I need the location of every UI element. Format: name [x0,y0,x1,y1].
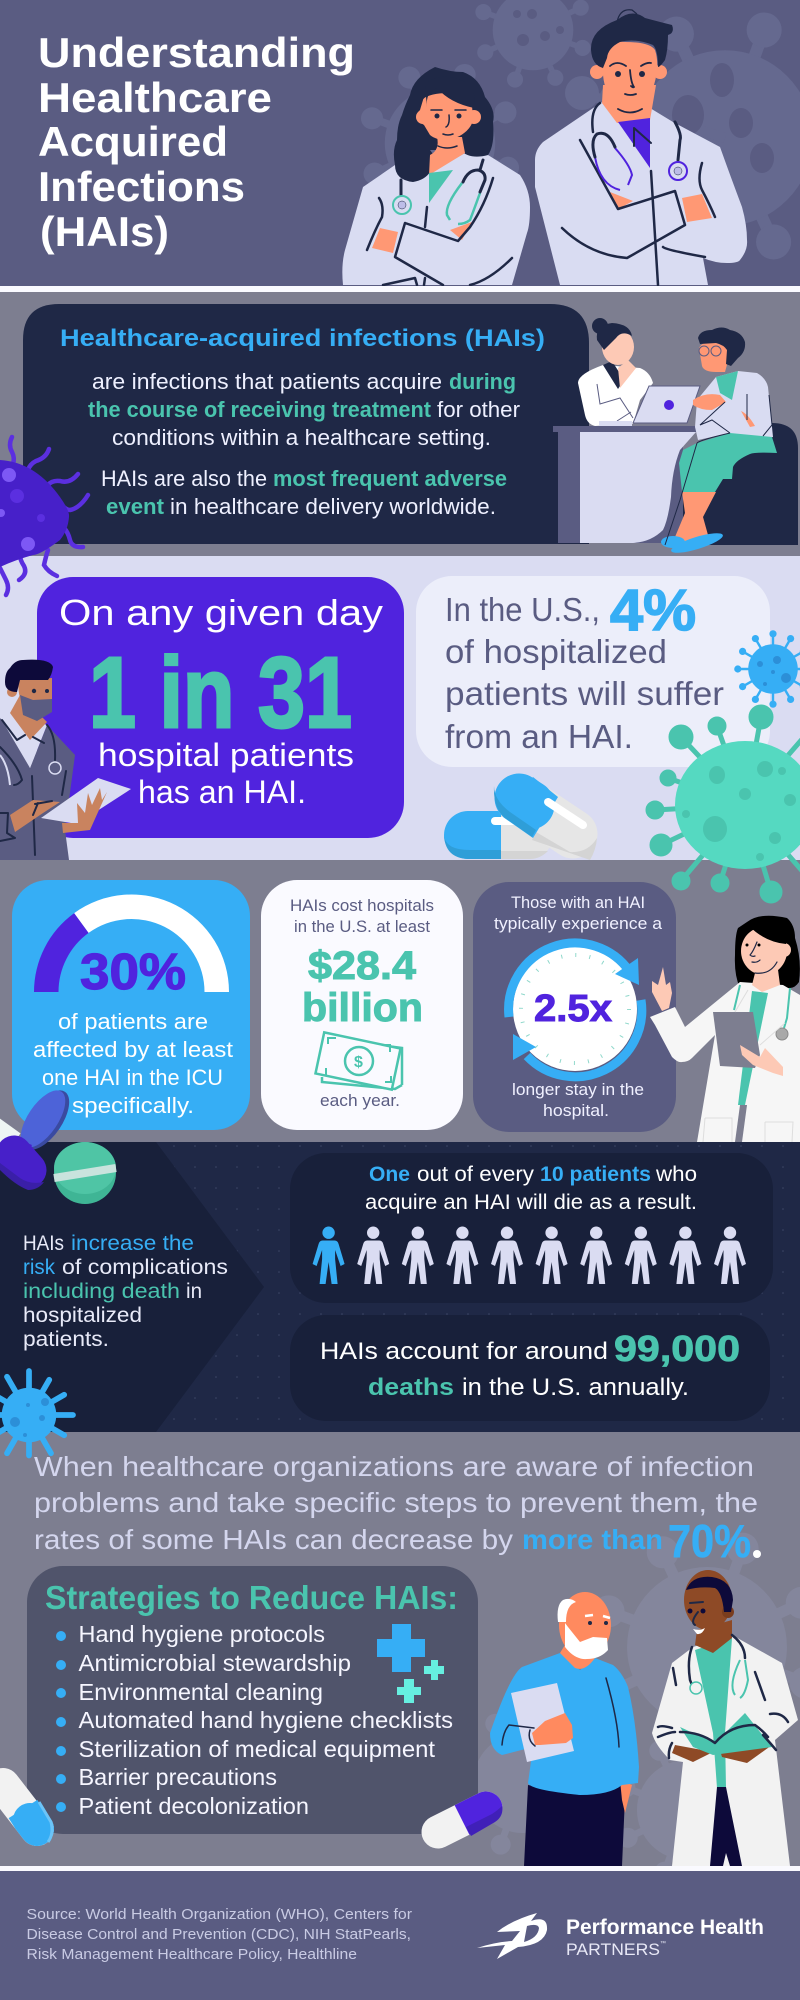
title [38,29,355,255]
panel: length of stay [473,882,676,1132]
panel: 4 percent: 4% [610,578,696,643]
source text: Source: World Health Organization (WHO), Centers for [26,1906,412,1923]
prevention paragraph: 70% [668,1515,751,1567]
title: Infections [38,163,245,210]
icon: money [315,1032,402,1090]
panel: 1 in 31: has an HAI. [138,774,306,810]
panel: risk arrow: increase the [71,1231,194,1255]
panel: 1 in 31: 1 in 31 [89,637,352,749]
icon: right capsule [438,1806,502,1836]
panel: risk arrow: risk [23,1255,55,1279]
panel: 4 percent: patients will suffer [445,675,724,712]
panel: 4 percent [416,576,770,767]
icon: small blue virus [734,630,800,708]
logo wordmark: PARTNERS [566,1941,660,1959]
lower background viruses [451,1533,800,1882]
panel: 30 percent ICU: 30% [80,943,186,1000]
illustration: female doctor [342,67,530,285]
panel: 99,000 deaths: deaths [368,1374,454,1401]
strategies list: Barrier precautions [78,1764,277,1790]
illustration: masked nurse [0,660,131,860]
icon: clock [509,943,642,1077]
panel: 4 percent: In the U.S., [445,591,600,628]
source text [26,1906,412,1963]
icon: purple germ [0,437,88,595]
definition text: are infections that patients acquire [92,369,442,394]
panel: one in ten [290,1153,773,1303]
panel: cost [261,880,463,1130]
panel: risk arrow: patients. [23,1327,109,1351]
panel: 30 percent ICU: one HAI in the ICU [42,1065,223,1090]
panel: 30 percent ICU: affected by at least [33,1037,233,1062]
panel: definition [23,304,589,544]
strategies list [78,1621,453,1819]
logo wordmark [566,1915,764,1959]
bullets [56,1631,66,1812]
panel: risk arrow: hospitalized [23,1303,142,1327]
panel: risk arrow: in [186,1279,202,1303]
title: Healthcare [38,74,272,121]
panel: one in ten: acquire an HAI will die as a result. [365,1191,697,1214]
panel: risk arrow: of complications [62,1255,228,1279]
panel: cost: each year. [320,1092,400,1110]
logo wordmark: ™ [660,1940,666,1947]
definition text [88,369,520,519]
panel: cost: HAIs cost hospitals [290,897,434,915]
icon: money: $ [354,1054,363,1071]
panel: risk arrow [0,1142,264,1432]
panel: 30 percent ICU: of patients are [58,1009,208,1034]
panel: 99,000 deaths: HAIs account for around [320,1338,608,1365]
prevention paragraph: When healthcare organizations are aware of infection [34,1451,754,1482]
title: (HAIs) [40,208,169,255]
title: Understanding [38,29,355,76]
panel: 1 in 31 [37,577,404,838]
strategies list: Patient decolonization [78,1793,309,1819]
illustration: doctor with clipboard [650,916,800,1142]
definition text: in healthcare delivery worldwide. [170,494,496,519]
white divider band [0,1866,800,1871]
strategies list: Hand hygiene protocols [78,1621,325,1647]
definition text: event [106,494,165,519]
source text: Disease Control and Prevention (CDC), NIH StatPearls, [26,1926,411,1943]
panel: 99,000 deaths [290,1315,770,1421]
icon: big teal virus [648,707,800,901]
icon: clock: 2.5x [534,988,612,1030]
panel: cost: billion [302,986,423,1030]
strategies list: Antimicrobial stewardship [78,1650,351,1676]
icon: left capsule [3,1785,52,1842]
prevention paragraph: rates of some HAIs can decrease by [34,1524,513,1555]
panel: strategies [27,1566,478,1834]
header background viruses [361,0,800,264]
definition heading: Healthcare-acquired infections (HAIs) [60,325,545,352]
definition text: HAIs are also the [101,466,267,491]
panel: 4 percent: of hospitalized [445,633,667,670]
definition text: for other [437,397,520,422]
panel: length of stay: Those with an HAI [511,894,645,912]
title: Acquired [38,118,228,165]
logo mark [477,1913,547,1959]
panel: 1 in 31: hospital patients [98,737,354,773]
panel: 99,000 deaths: in the U.S. annually. [462,1374,689,1401]
panel: cost: in the U.S. at least [294,918,430,936]
panel: 30 percent ICU: specifically. [72,1093,194,1118]
panel: 4 percent: from an HAI. [445,718,633,755]
source text: Risk Management Healthcare Policy, Healthline [26,1946,357,1963]
logo [477,1913,764,1959]
panel: 1 in 31: On any given day [59,592,383,633]
pictogram: ten people [313,1226,746,1284]
panel: risk arrow: including death [23,1279,180,1303]
strategies list: Automated hand hygiene checklists [78,1707,453,1733]
prevention paragraph [34,1451,761,1567]
definition text: most frequent adverse [273,466,507,491]
illustration: consultation at desk [553,318,798,557]
illustration: male doctor [535,10,747,285]
panel: cost: $28.4 [308,944,417,988]
panel: one in ten: One [369,1163,410,1186]
definition text: during [449,369,516,394]
panel: length of stay: hospital. [543,1102,609,1120]
definition text: conditions within a healthcare setting. [112,425,491,450]
panel: length of stay: longer stay in the [512,1081,644,1099]
strategies list: Environmental cleaning [78,1679,323,1705]
panel: one in ten: who [655,1163,697,1186]
illustration: senior patient [490,1592,639,1866]
panel: risk arrow: HAIs [23,1231,64,1255]
panel: one in ten: out of every [417,1163,535,1186]
gauge chart [34,894,229,992]
prevention paragraph: more than [522,1524,663,1555]
icon: tablet and capsule [0,1083,116,1204]
panel: one in ten: 10 patients [540,1163,651,1186]
panel: 99,000 deaths: 99,000 [614,1328,740,1369]
icon: blue virus [0,1371,73,1455]
logo wordmark: Performance Health [566,1915,764,1939]
panel: length of stay: typically experience a [494,915,663,933]
definition text: the course of receiving treatment [88,397,432,422]
strategies heading: Strategies to Reduce HAIs: [45,1579,458,1616]
icon: pills [444,777,597,860]
panel: 30 percent ICU [12,880,250,1130]
illustration: doctor with book [652,1570,798,1866]
icon: crosses [377,1624,444,1703]
white divider band [0,286,800,292]
prevention paragraph: problems and take specific steps to prevent them, the [34,1487,758,1518]
strategies list: Sterilization of medical equipment [78,1736,436,1762]
